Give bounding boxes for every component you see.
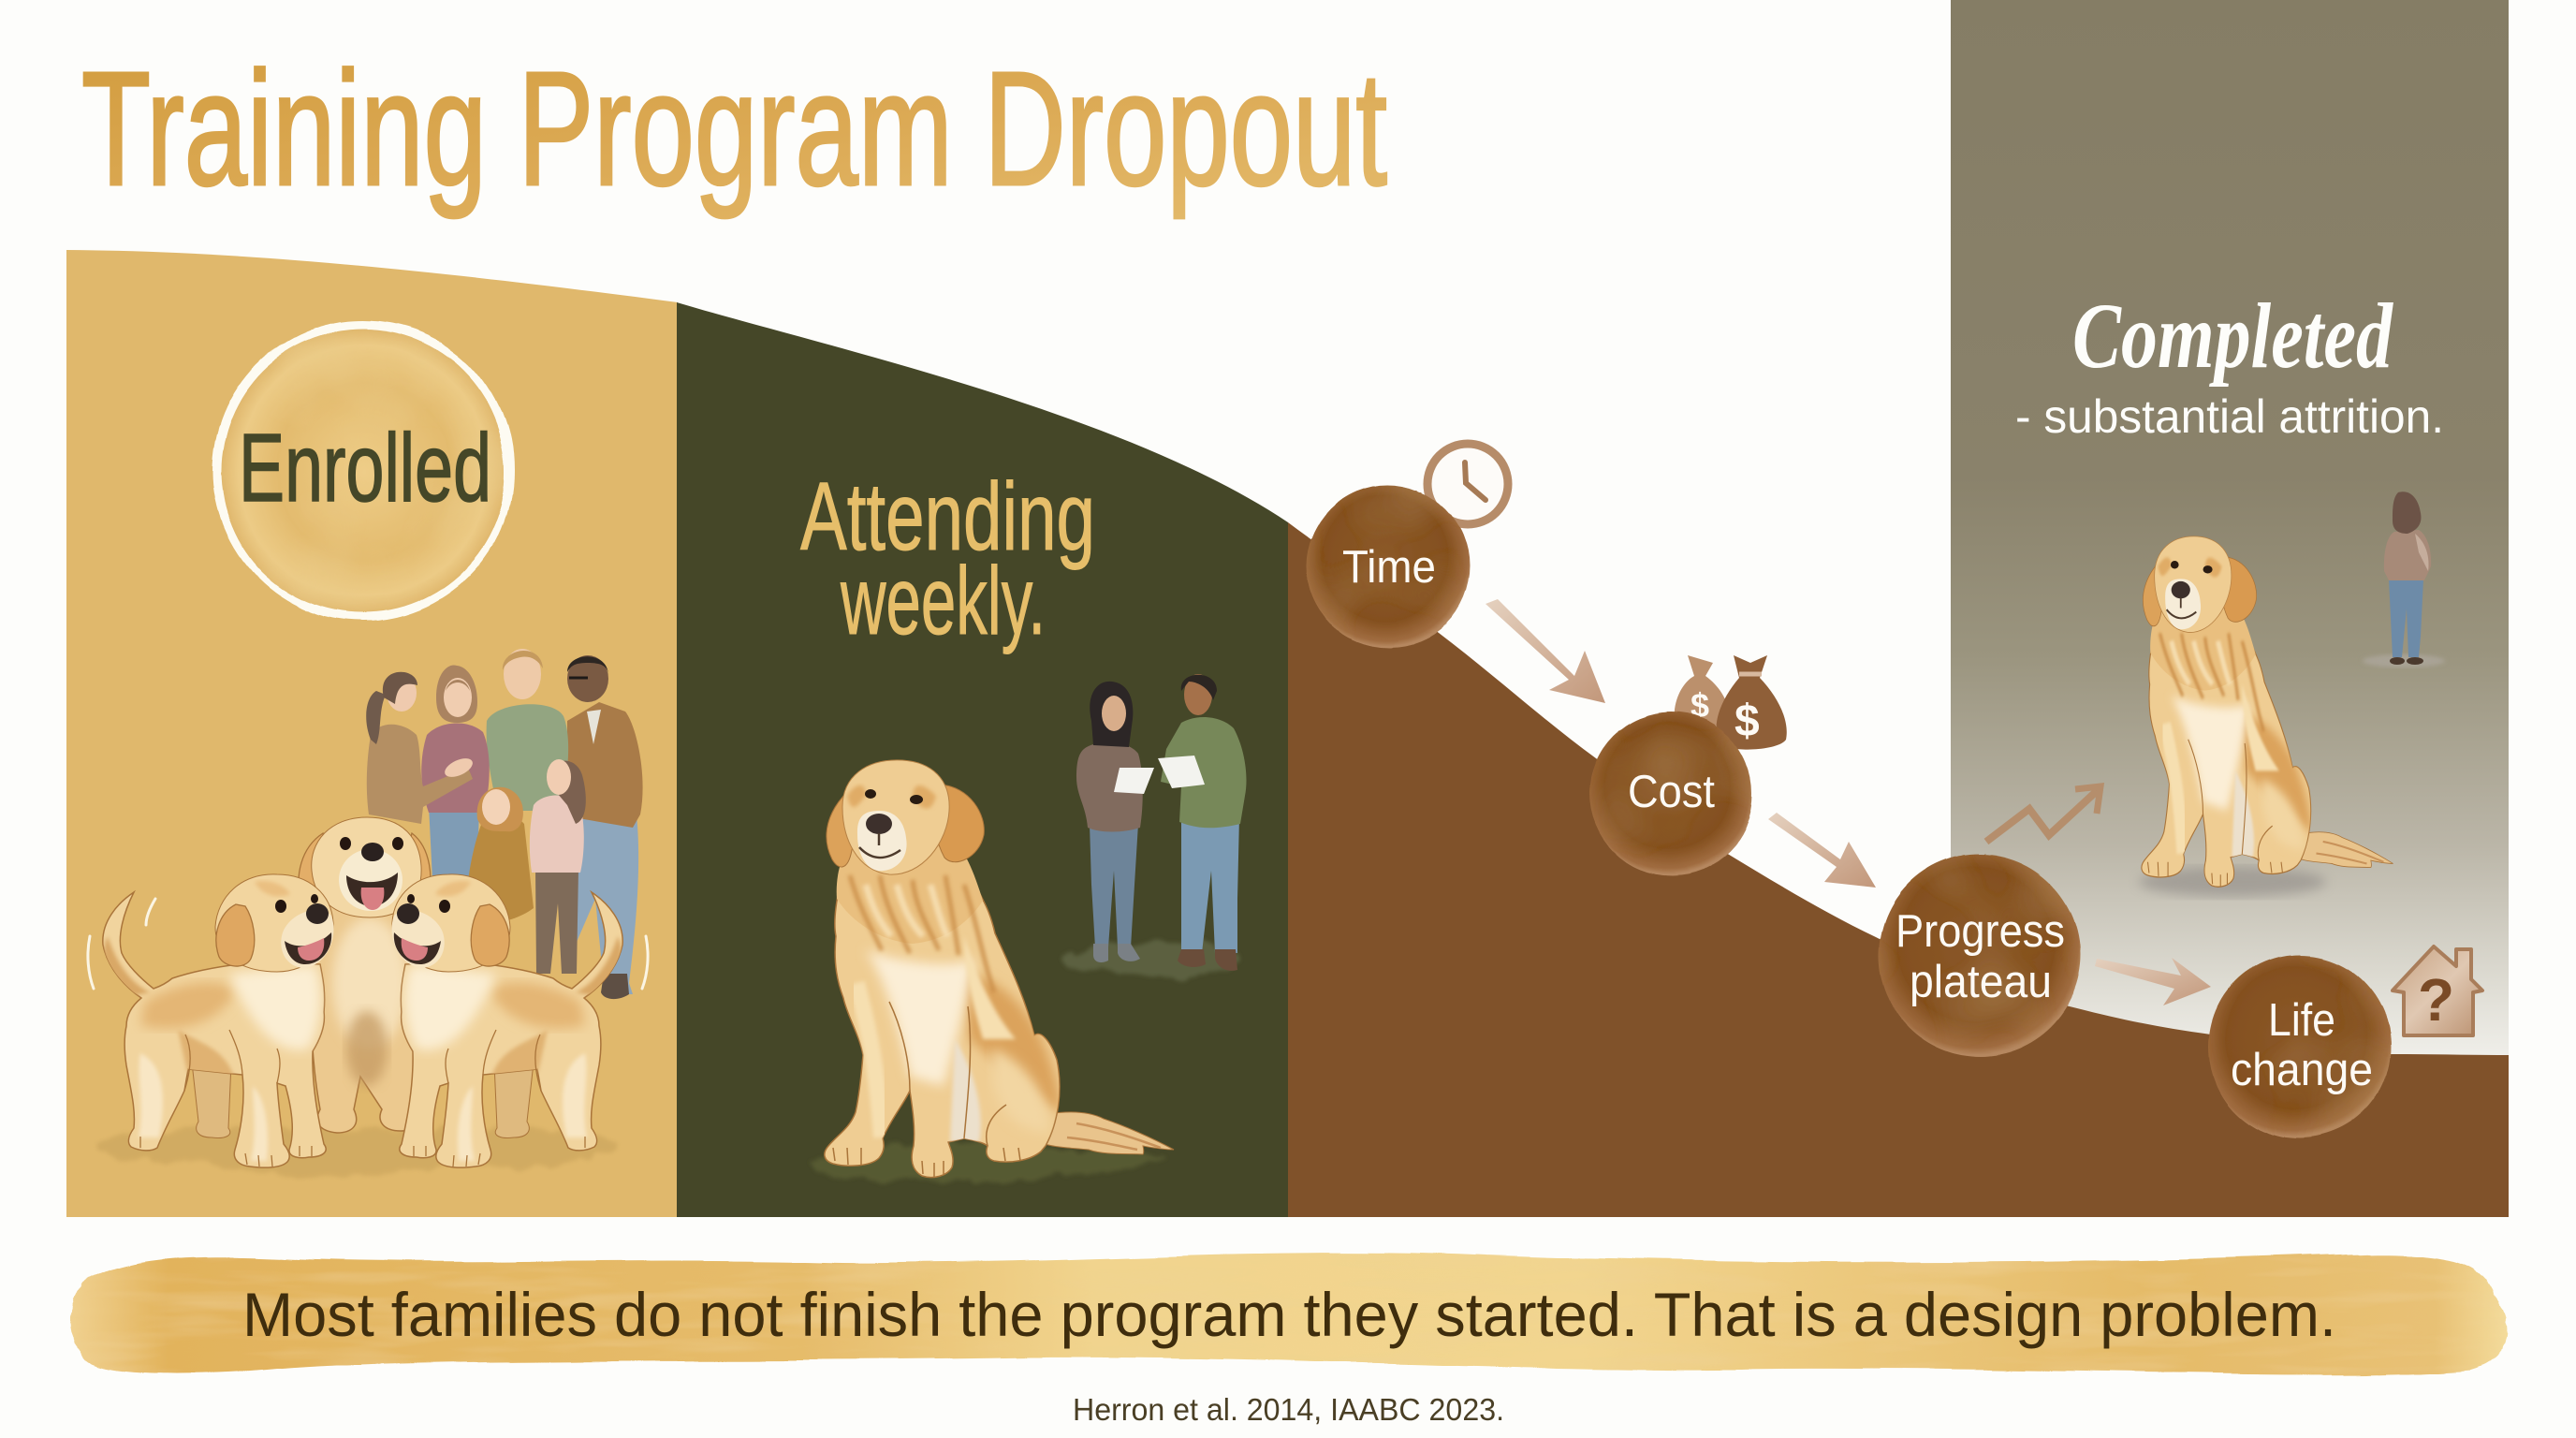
- enrolled badge: [212, 320, 514, 622]
- completed heading: Completed: [2072, 284, 2394, 388]
- panel: completed: [1951, 0, 2509, 1058]
- icon: house with question mark: [2393, 946, 2482, 1035]
- arrow: progress to life change: [2095, 958, 2211, 1005]
- arrow: cost to progress: [1768, 813, 1876, 888]
- node: life change: change: [2231, 1045, 2373, 1095]
- node: time: Time: [1342, 542, 1436, 593]
- arrow: time to cost: [1486, 599, 1605, 703]
- man in green sweater: [487, 649, 568, 811]
- node: cost: Cost: [1628, 767, 1715, 817]
- illustration: center puppy: [299, 817, 432, 1133]
- icon: money bags: $: [1734, 697, 1760, 746]
- node: progress plateau: plateau: [1910, 957, 2052, 1007]
- illustration: right puppy: [392, 874, 622, 1167]
- panel: drop-off slope: [1288, 522, 2509, 1217]
- completed panel background: [1951, 0, 2509, 1058]
- illustration: seated dog: [2142, 536, 2393, 887]
- citation: Herron et al. 2014, IAABC 2023.: [1073, 1392, 1504, 1427]
- node: life change: [2208, 955, 2392, 1138]
- panel: enrolled: [66, 250, 678, 1217]
- attending label: weekly.: [840, 547, 1046, 654]
- node: time: [1307, 485, 1470, 648]
- node: cost: [1589, 712, 1752, 875]
- man with paper: [1158, 674, 1247, 971]
- node: progress plateau: Progress: [1895, 906, 2065, 957]
- ground patch: [1064, 943, 1244, 976]
- icon: rising zigzag arrow: [1986, 786, 2100, 842]
- seated dog shadow: [2139, 867, 2326, 897]
- node: progress plateau: [1879, 854, 2081, 1056]
- younger girl in mustard dress: [465, 787, 534, 923]
- older girl in pink: [530, 759, 586, 974]
- icon: house with question mark: ?: [2418, 966, 2454, 1034]
- icon: clock: [1427, 444, 1508, 524]
- icon: person walking away: [2363, 492, 2445, 668]
- tail wag marks: [88, 899, 648, 989]
- illustration: attending seated dog: [825, 760, 1174, 1178]
- attending label: [800, 462, 1095, 654]
- node: life change: Life: [2268, 995, 2335, 1046]
- completed subtitle: - substantial attrition.: [2015, 390, 2444, 443]
- illustration: left puppy: [103, 874, 333, 1167]
- illustration: family group: [366, 649, 643, 999]
- man's shoe: [601, 974, 629, 999]
- woman in pink sweater: [421, 666, 490, 880]
- woman with paper: [1076, 682, 1154, 962]
- enrolled label: Enrolled: [239, 414, 491, 521]
- icon: money bags: [1675, 655, 1787, 750]
- icon: money bags: $: [1690, 686, 1709, 725]
- panel: attending weekly: [677, 302, 1288, 1217]
- ground under seated dog: [809, 1143, 1165, 1182]
- illustration: couple with notes: [1064, 674, 1247, 976]
- takeaway banner: [69, 1253, 2508, 1374]
- man in brown jacket: [567, 655, 643, 994]
- woman with ponytail: [366, 672, 476, 824]
- takeaway text: Most families do not finish the program they started. That is a design problem.: [242, 1280, 2336, 1349]
- title: Training Program Dropout: [81, 37, 1387, 219]
- puppy ground wash: [95, 1126, 615, 1175]
- attending label: Attending: [800, 462, 1095, 570]
